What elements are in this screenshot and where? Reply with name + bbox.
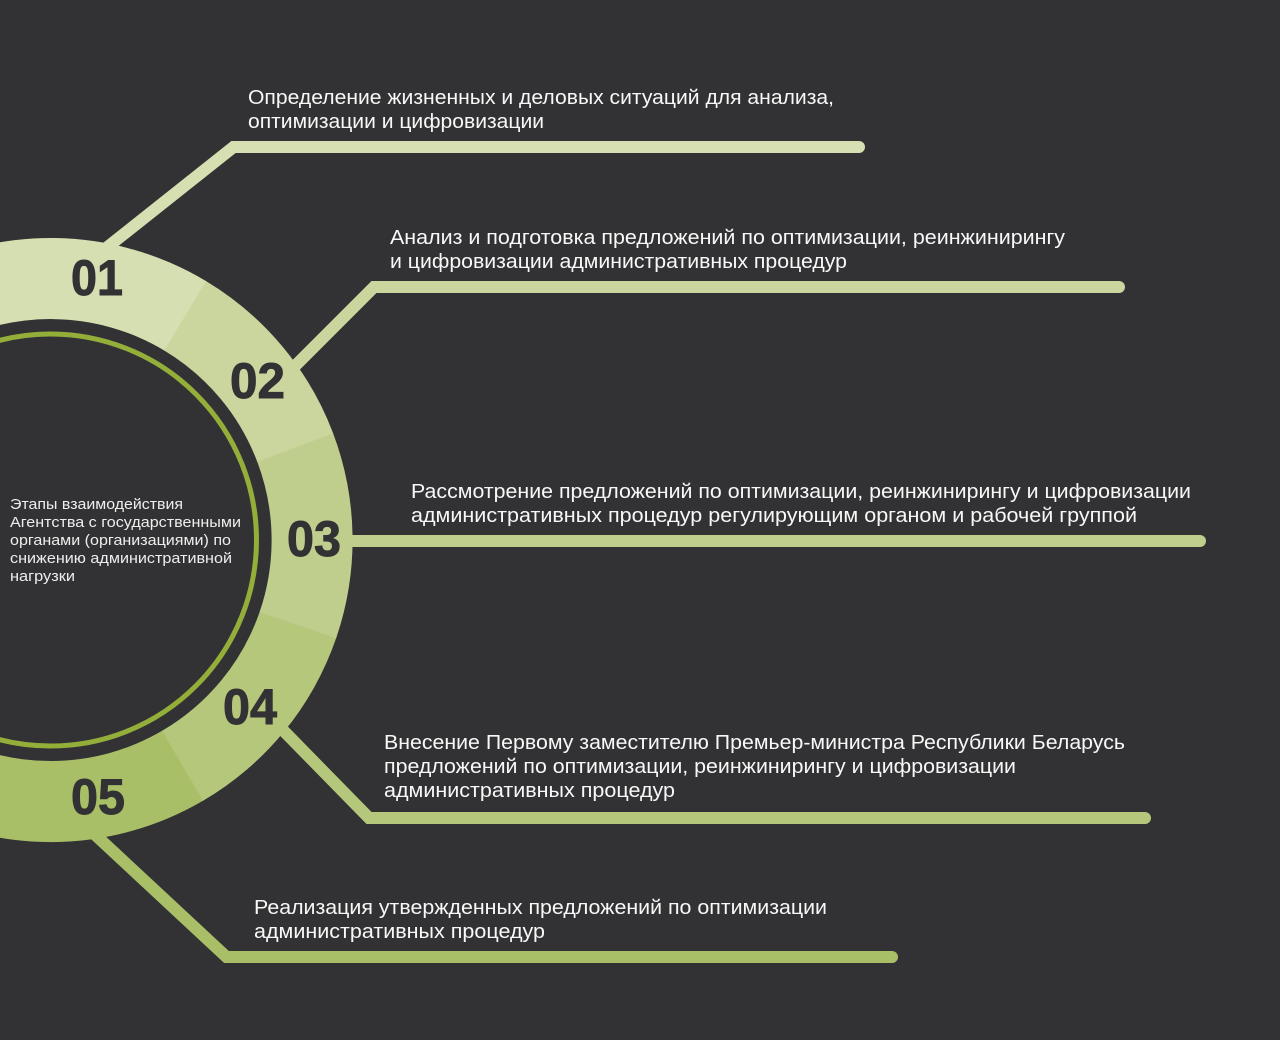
- center caption: нагрузки: [10, 569, 75, 585]
- step 05 text: Реализация утвержденных предложений по оптимизации: [254, 896, 827, 919]
- segment 03: [257, 433, 353, 638]
- seam cover 03-04: [260, 612, 336, 638]
- step 02 text: [390, 226, 1066, 273]
- segment 01: [0, 238, 206, 540]
- step 01 text: [248, 86, 834, 133]
- segment 02: [164, 281, 333, 462]
- step 05 text: административных процедур: [254, 920, 545, 943]
- number 05: 05: [71, 769, 125, 825]
- segment 04: [162, 612, 336, 801]
- seam cover 02-03: [257, 433, 333, 462]
- step 04 text: предложений по оптимизации, реинжинирингу и цифровизации: [384, 755, 1016, 778]
- step 01 text: Определение жизненных и деловых ситуаций для анализа,: [248, 86, 834, 109]
- leader line 03: [340, 535, 1200, 547]
- number 01: 01: [71, 250, 123, 306]
- step 01 text: оптимизации и цифровизации: [248, 110, 544, 133]
- number 04: 04: [223, 679, 277, 735]
- step 03 text: [411, 480, 1191, 527]
- center caption: снижению административной: [10, 551, 232, 567]
- number 02: 02: [230, 353, 285, 409]
- segmented ring: [0, 238, 353, 842]
- step 02 text: Анализ и подготовка предложений по оптимизации, реинжинирингу: [390, 226, 1066, 249]
- leader line 04: [275, 722, 1145, 818]
- step 03 text: Рассмотрение предложений по оптимизации, реинжинирингу и цифровизации: [411, 480, 1191, 503]
- seam cover 04-05: [162, 731, 203, 801]
- segment 05: [0, 540, 203, 842]
- step 02 text: и цифровизации административных процедур: [390, 250, 847, 273]
- step 04 text: Внесение Первому заместителю Премьер-министра Республики Беларусь: [384, 731, 1125, 754]
- step 04 text: административных процедур: [384, 779, 675, 802]
- step 04 text: [384, 731, 1125, 802]
- leader line 02: [285, 287, 1119, 376]
- number 03: 03: [287, 511, 341, 567]
- center caption: Этапы взаимодействия: [10, 497, 183, 513]
- seam cover 01-02: [164, 281, 206, 351]
- center caption: Агентства с государственными: [10, 515, 241, 531]
- leader line 05: [90, 830, 892, 957]
- center caption: органами (организациями) по: [10, 533, 231, 549]
- step 05 text: [254, 896, 827, 943]
- inner green ring: [0, 334, 256, 746]
- center caption: [10, 497, 241, 585]
- leader line 01: [100, 147, 859, 253]
- step 03 text: административных процедур регулирующим органом и рабочей группой: [411, 504, 1137, 527]
